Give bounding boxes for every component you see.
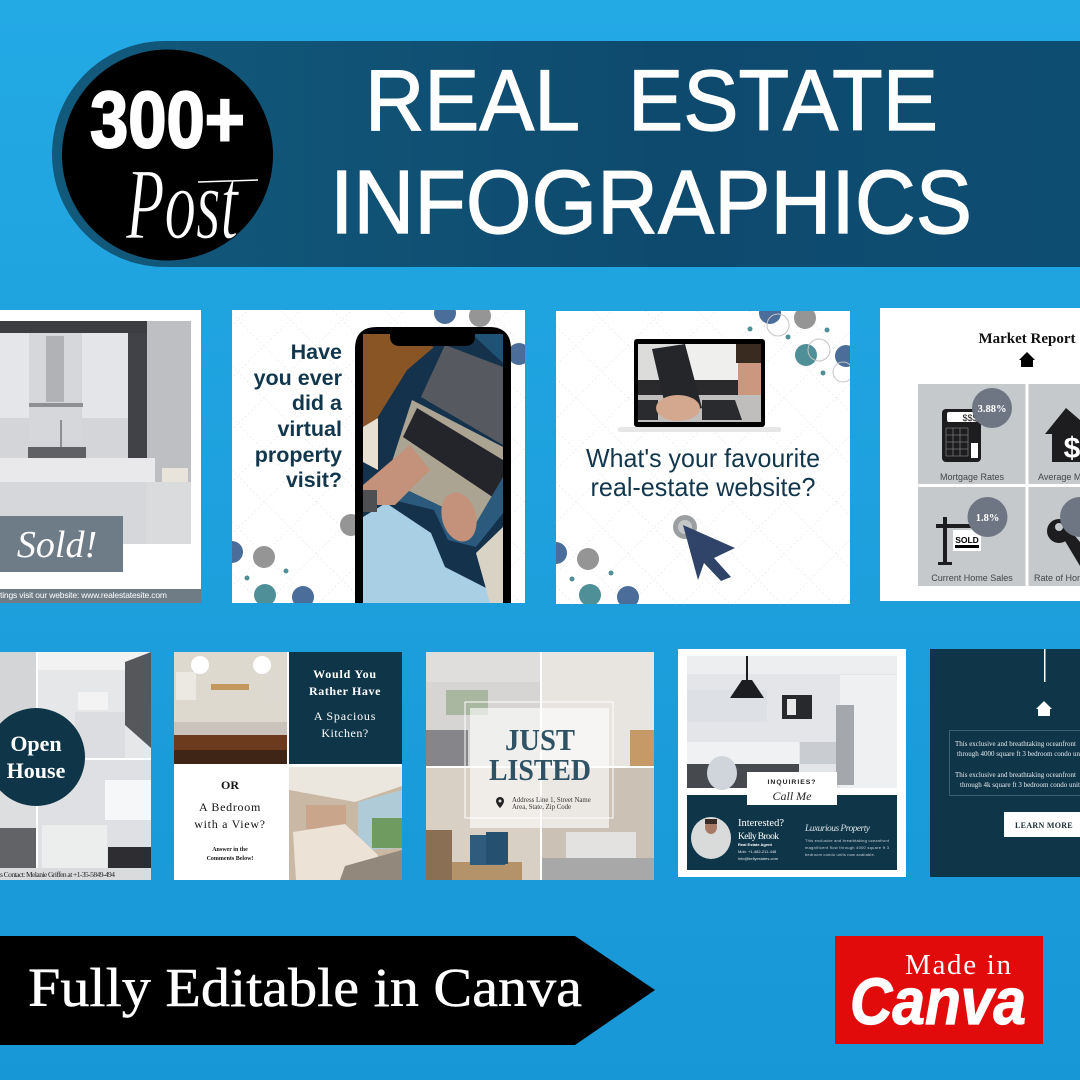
question text (254, 340, 343, 492)
text cell: bedroom: OR (221, 778, 239, 792)
title: INFOGRAPHICS (330, 153, 972, 253)
panel: open house (0, 652, 151, 880)
text box: This exclusive and breathtaking oceanfront (955, 771, 1076, 779)
navy info panel: Mob: +1-482-211-448 (738, 849, 777, 854)
tile: current home sales: 1.8% (976, 513, 999, 524)
banner shape (52, 41, 1080, 267)
tile: average: $ (1064, 432, 1080, 465)
tile: mortgage rates: $$$ (962, 413, 978, 423)
text cell: bedroom (194, 778, 266, 862)
footer bar (0, 868, 151, 880)
title: REAL (365, 53, 580, 149)
panel: just listed (426, 652, 654, 880)
laptop mockup (618, 339, 781, 432)
circle callout (0, 708, 85, 806)
kitchen photo (687, 656, 897, 790)
tile: rate of home (1028, 487, 1080, 586)
navy info panel: Luxurious Property (804, 824, 871, 834)
text box: This exclusive and breathtaking oceanfront (955, 740, 1076, 748)
heading: LISTED (489, 752, 591, 787)
button: learn more: LEARN MORE (1015, 821, 1073, 830)
circle callout: House (7, 758, 66, 783)
badge: made in canva (835, 936, 1043, 1044)
badge: 300+ Post: 300+ (90, 75, 245, 164)
bedroom photo (289, 767, 402, 880)
icon: map pin (496, 797, 504, 808)
bubbles (545, 302, 857, 608)
arrow banner: Fully Editable in Canva (28, 957, 582, 1018)
tile: mortgage rates: Mortgage Rates (940, 472, 1005, 482)
navy info panel: info@kellyestates.com (738, 856, 779, 861)
tile: current home sales (918, 487, 1026, 586)
question text: real-estate website? (590, 472, 816, 502)
question text: virtual (277, 417, 342, 441)
question text: What's your favourite (586, 443, 820, 473)
title (330, 53, 972, 253)
text cell: kitchen: Would You (313, 667, 377, 681)
question text: visit? (286, 468, 342, 492)
footer bar (0, 589, 201, 603)
call me card: Call Me (772, 789, 812, 803)
heading: JUST (505, 722, 575, 757)
text cell: kitchen (289, 652, 402, 764)
text cell: bedroom: with a View? (194, 817, 266, 831)
title: ESTATE (628, 53, 938, 149)
badge: made in canva: Canva (850, 964, 1026, 1038)
panel: virtual property visit (232, 310, 525, 603)
panel: sold kitchen (0, 310, 201, 603)
button: learn more (1004, 812, 1080, 837)
call me card (747, 772, 837, 805)
question text: property (255, 443, 342, 467)
navy info panel: Real Estate Agent (738, 842, 773, 847)
portrait (691, 817, 731, 859)
text cell: kitchen: A Spacious (314, 709, 376, 723)
icon: cursor (673, 515, 735, 581)
address (512, 797, 591, 811)
address: Area, State, Zip Code (512, 804, 571, 811)
sold banner (0, 516, 123, 572)
badge: 300+ Post: Post (125, 148, 240, 261)
navy info panel: bedroom condo units now available. (805, 852, 875, 857)
panel: favourite website (556, 311, 850, 604)
navy info panel (687, 795, 897, 870)
text cell: kitchen: Kitchen? (321, 726, 369, 740)
sold banner: Sold! (17, 524, 97, 566)
tile: current home sales: Current Home Sales (931, 573, 1013, 583)
tile: mortgage rates: 3.88% (978, 404, 1006, 415)
heading (489, 722, 591, 787)
text box (950, 730, 1080, 796)
address: Address Line 1, Street Name (512, 797, 591, 804)
heading: Market Report (978, 331, 1076, 347)
footer bar: s Contact: Melanie Griffen at +1-35-5849-494 (0, 870, 115, 879)
call me card: INQUIRIES? (768, 779, 816, 786)
header banner (52, 41, 1080, 267)
text cell: bedroom: Comments Below! (207, 856, 253, 862)
tile: current home sales: SOLD (955, 535, 979, 545)
circle callout: Open (10, 731, 62, 756)
photo grid (0, 652, 151, 868)
navy info panel: Interested? (738, 818, 784, 829)
overlay card (465, 702, 613, 828)
badge: 300+ Post (62, 50, 273, 261)
badge: made in canva: Made in (905, 949, 1012, 981)
phone mockup (355, 327, 511, 603)
navy info panel: This exclusive and breathtaking oceanfront (805, 838, 890, 843)
tile: average (1028, 384, 1080, 484)
bubbles (221, 302, 530, 608)
text box: through 4k square ft 3 bedroom condo units (960, 781, 1080, 789)
question text (586, 443, 820, 502)
text cell: kitchen: Rather Have (309, 684, 381, 698)
kitchen photo (0, 321, 191, 544)
icon: house (1036, 701, 1052, 716)
panel: market report (880, 308, 1080, 601)
tile: mortgage rates (918, 384, 1026, 484)
icon: house (1019, 352, 1035, 367)
footer bar: tings visit our website: www.realestatesite.com (0, 590, 167, 600)
text cell: bedroom: A Bedroom (199, 800, 261, 814)
question text: Have (291, 340, 342, 364)
panel: would you rather (174, 652, 402, 880)
panel: inquiries (678, 649, 906, 877)
question text: you ever (254, 366, 343, 390)
photo grid (426, 652, 654, 880)
panel: learn more (930, 649, 1080, 877)
arrow banner (0, 936, 655, 1045)
navy info panel: magnificent flow through 4000 square ft 3 (805, 845, 890, 850)
navy info panel: Kelly Brook (738, 832, 779, 842)
question text: did a (292, 391, 343, 415)
kitchen photo (174, 652, 287, 764)
text cell: bedroom: Answer in the (212, 847, 248, 853)
